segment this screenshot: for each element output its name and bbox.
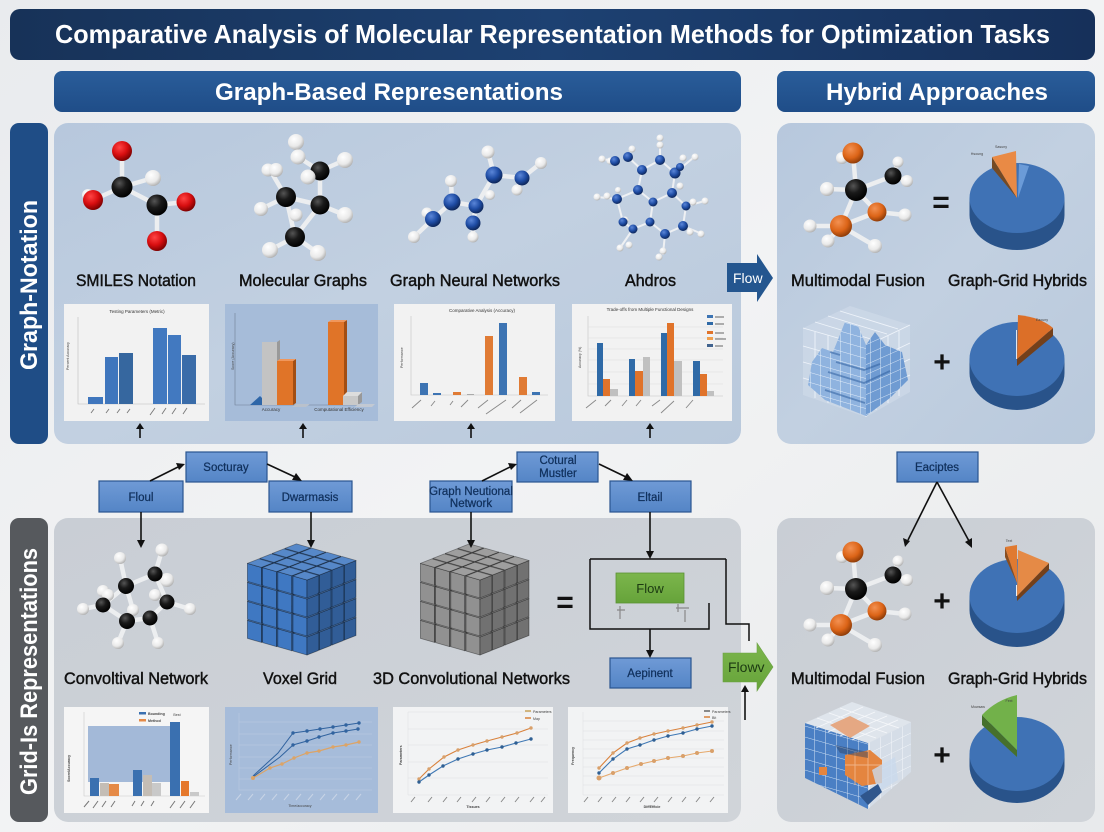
- arrow: chart 3 up: [467, 423, 475, 438]
- label: Ahdros: Ahdros: [625, 272, 676, 290]
- arrow: Floul to Socturay: [150, 463, 185, 481]
- icon: polycyclic molecule: [594, 134, 708, 260]
- bar chart 3: Comparative Analysis (Accuracy): [449, 308, 516, 313]
- flow box: Dwarmasis: Dwarmasis: [282, 492, 339, 504]
- flow diagram: green flow box: [590, 559, 726, 629]
- bar chart 2: [225, 304, 378, 421]
- heading: graph-based representations: [54, 71, 741, 112]
- flow box: Examples: Eaciptes: [915, 462, 959, 474]
- flow box: Aepinent: Aepinent: [627, 668, 674, 680]
- arrow: Floul down: [137, 512, 145, 548]
- icon: SMILES molecule: [82, 141, 196, 251]
- arrow: Graph Neutional Network to Cotural Mustler: [482, 463, 517, 481]
- flow box: Cotural Mustler: Mustler: [539, 468, 577, 480]
- heading: hybrid approaches: [777, 71, 1095, 112]
- line chart 6: Performance: [229, 744, 233, 765]
- side label: graph-notation: [10, 123, 48, 444]
- label: Graph Neural Networks: Graph Neural Networks: [390, 272, 560, 290]
- arrow: Socturay to Dwarmasis: [267, 464, 302, 481]
- icon: molecular graph molecule: [254, 134, 353, 261]
- bar chart 3: Performance: [400, 347, 404, 368]
- line chart 7: Parameters: [399, 745, 403, 765]
- arrow: Cotural Mustler to Eltail: [599, 464, 633, 481]
- line chart 7: [393, 707, 553, 813]
- icon: gray voxel grid: [420, 544, 529, 655]
- line chart 8: Frequency: [571, 747, 575, 765]
- bar chart 1: Percent Accuracy: [66, 342, 70, 370]
- pie chart 4: [970, 695, 1064, 803]
- flow box: Aepinent: [610, 658, 691, 688]
- title banner: [10, 9, 1095, 60]
- label: Voxel Grid: Voxel Grid: [263, 670, 337, 688]
- flow box: Cotural Mustler: Cotural: [539, 455, 577, 467]
- icon: multimodal molecule: [804, 542, 913, 652]
- arrow: Dwarmasis down: [307, 512, 315, 548]
- pie chart 3: Text: [1006, 539, 1012, 543]
- arrow: flow to hybrid: Flow: [733, 270, 763, 286]
- flow diagram: green flow box: Flow: [636, 581, 664, 596]
- label: Multimodal Fusion: Multimodal Fusion: [791, 272, 925, 290]
- bar chart 4: [572, 304, 732, 421]
- bar chart 5: Bounding: [148, 712, 165, 716]
- flow box: Floul: Floul: [129, 492, 153, 504]
- pie chart 4: Mowsaw: [971, 705, 985, 709]
- line chart 7: Map: [533, 717, 540, 721]
- line chart 8: [568, 707, 731, 813]
- pie chart 4: Fext: [1006, 699, 1012, 703]
- side label: graph-notation: Graph-Notation: [16, 200, 43, 370]
- pie chart 1: Sasuny: [995, 145, 1007, 149]
- flow box: Cotural Mustler: [517, 452, 598, 482]
- heading: hybrid approaches: Hybrid Approaches: [826, 79, 1048, 106]
- line chart 8: Parameters: [712, 710, 731, 714]
- line chart 7: Tissues: [466, 805, 480, 809]
- label: Convoltival Network: Convoltival Network: [64, 670, 209, 688]
- bar chart 2: Computational Efficiency: [314, 407, 364, 412]
- icon: translucent voxel grid: [803, 306, 910, 417]
- pie chart 2: [970, 315, 1064, 410]
- icon: graph neural network molecule: [408, 146, 547, 243]
- bar chart 2: Accuracy: [262, 407, 281, 412]
- plus sign: +: [933, 346, 951, 379]
- plus sign: +: [933, 739, 951, 772]
- label: Multimodal Fusion: Multimodal Fusion: [791, 670, 925, 688]
- panel: graph-based methods: [54, 123, 741, 444]
- side label: grid representations: Grid-Is Representations: [16, 548, 43, 795]
- line chart 6: [225, 707, 378, 813]
- equals sign: =: [932, 186, 950, 219]
- label: Molecular Graphs: Molecular Graphs: [239, 272, 367, 290]
- arrow: flow to hybrid: [727, 254, 773, 302]
- icon: convolutional molecule: [77, 544, 196, 649]
- flow box: Eltail: Eltail: [638, 492, 662, 504]
- flow box: Examples: [897, 452, 978, 482]
- flow box: Dwarmasis: [269, 481, 352, 512]
- bar chart 4: Trade-offs from Multiple Functional Designs: [607, 307, 694, 312]
- arrow: flow box to Aepinent: [646, 629, 654, 658]
- bar chart 1: Testing Parameters (Metric): [109, 309, 165, 314]
- line chart 8: DiffEfficie: [644, 805, 660, 809]
- arrow: chart 2 up: [299, 423, 307, 438]
- panel: grid-based methods: [54, 518, 741, 822]
- line chart 6: Time/accuracy: [288, 804, 312, 808]
- flow box: Socturay: [186, 452, 267, 482]
- line chart 7: Parameters: [533, 710, 552, 714]
- flow box: Graph Neutional Network: Graph Neutional: [429, 486, 513, 498]
- line chart 8: Bit: [712, 716, 716, 720]
- panel: hybrid approaches top: [777, 123, 1095, 444]
- label: Graph-Grid Hybrids: Graph-Grid Hybrids: [948, 670, 1087, 688]
- bar chart 5: Method: [148, 719, 161, 723]
- heading: graph-based representations: Graph-Based Representations: [215, 79, 563, 106]
- flow box: Eltail: [610, 481, 691, 512]
- bar chart 5: [64, 707, 209, 813]
- bar chart 3: [394, 304, 555, 421]
- bar chart 2: Score (Accuracy): [231, 342, 235, 370]
- flow box: Graph Neutional Network: Network: [450, 498, 492, 510]
- bar chart 1: [64, 304, 209, 421]
- icon: multimodal molecule: [804, 142, 913, 253]
- arrow: Examples to pie: [937, 482, 972, 548]
- arrow: Graph Neutional Network down: [467, 512, 475, 548]
- plus sign: +: [933, 585, 951, 618]
- bar chart 4: Accuracy (%): [578, 347, 582, 368]
- icon: hybrid voxel grid: [805, 702, 911, 809]
- flow box: Socturay: Socturay: [203, 462, 249, 474]
- panel: hybrid approaches bottom: [777, 518, 1095, 822]
- arrow: Examples to multimodal: [903, 482, 937, 547]
- flow box: Graph Neutional Network: [429, 481, 513, 512]
- label: SMILES Notation: SMILES Notation: [76, 272, 196, 290]
- arrow: chart 4 up: [646, 423, 654, 438]
- arrow: chart 1 up: [136, 423, 144, 438]
- side label: grid representations: [10, 518, 48, 822]
- pie chart 1: [970, 145, 1064, 250]
- label: 3D Convolutional Networks: 3D Convolutional Networks: [373, 670, 570, 688]
- arrow: up into green flow: [741, 685, 749, 720]
- pie chart 3: [970, 539, 1064, 647]
- pie chart 1: Hsoung: [971, 152, 983, 156]
- equals sign: =: [556, 586, 574, 619]
- arrow: green flow: [723, 643, 773, 691]
- arrow: Eltail down: [646, 512, 654, 559]
- connector: flow box to green arrow: [726, 559, 749, 641]
- title banner: Comparative Analysis of Molecular Representation Methods for Optimization Tasks: [55, 19, 1050, 49]
- icon: blue voxel grid: [247, 544, 356, 655]
- arrow: green flow: Flowv: [728, 659, 765, 675]
- flow box: Floul: [99, 481, 183, 512]
- label: Graph-Grid Hybrids: Graph-Grid Hybrids: [948, 272, 1087, 290]
- bar chart 5: Best: [173, 713, 181, 717]
- bar chart 5: Score/Accuracy: [67, 755, 71, 782]
- pie chart 2: Eaouny: [1036, 318, 1048, 322]
